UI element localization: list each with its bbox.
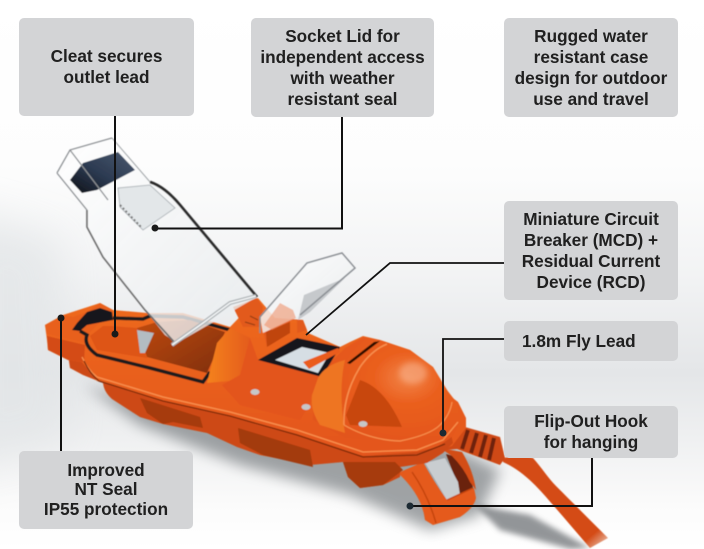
product shadow <box>85 385 590 549</box>
skirt recess left <box>140 398 203 428</box>
leader line: hook <box>406 458 592 510</box>
callout: hook: Flip-Out Hook <box>534 411 648 431</box>
callout: seal <box>19 451 193 529</box>
dark lid seal <box>70 152 135 193</box>
callout: circuit breaker: Breaker (MCD) + <box>524 230 658 250</box>
callout: fly lead <box>504 321 678 361</box>
inner well <box>137 320 225 373</box>
seam lines <box>82 357 458 452</box>
hinge area <box>233 298 307 347</box>
callout: seal: IP55 protection <box>44 499 168 519</box>
left end top face <box>45 303 113 343</box>
callout: socket lid <box>251 18 434 117</box>
callout: fly lead: 1.8m Fly Lead <box>522 330 636 350</box>
leader line: cleat <box>112 116 118 338</box>
platform inside well <box>90 326 147 358</box>
cleat metal contact <box>137 330 154 353</box>
callout: seal: NT Seal <box>74 479 138 499</box>
callout: socket lid: resistant seal <box>288 88 397 108</box>
hood <box>312 337 452 444</box>
callout: cleat: Cleat secures <box>51 46 162 66</box>
callout: circuit breaker <box>504 201 678 300</box>
skirt recess middle <box>238 428 313 467</box>
callout: cleat: outlet lead <box>64 67 149 87</box>
product: orange power outlet <box>45 138 608 548</box>
left end front face <box>47 336 85 362</box>
callout: circuit breaker: Residual Current <box>522 250 660 270</box>
small clear socket lid <box>260 253 355 333</box>
cleat recess black block <box>72 308 113 331</box>
callout: socket lid: independent access <box>260 46 425 66</box>
flip-out hook <box>398 448 476 525</box>
callout: hook <box>504 406 678 458</box>
rear collar <box>436 392 466 452</box>
callout: rugged case: Rugged water <box>534 26 648 46</box>
centre orange bridge <box>207 328 258 383</box>
front panel <box>222 338 322 420</box>
strain relief <box>445 420 505 465</box>
callout: rugged case: resistant case <box>534 46 648 66</box>
callout: rugged case <box>504 18 678 117</box>
cord <box>503 456 608 548</box>
main body top <box>45 298 460 456</box>
lower skirt <box>68 350 453 488</box>
screws <box>250 389 368 427</box>
callout: rugged case: use and travel <box>533 88 649 108</box>
lid base rim <box>172 296 256 345</box>
callout: socket lid: with weather <box>290 68 395 88</box>
leader line: fly lead <box>440 339 504 436</box>
seal gasket <box>80 316 230 382</box>
skirt recess right <box>343 462 403 488</box>
callout: rugged case: design for outdoor <box>515 68 667 88</box>
leader line: circuit breaker <box>306 263 504 335</box>
leader line: socket lid <box>152 117 342 232</box>
lid latch <box>118 185 175 230</box>
callout: circuit breaker: Device (RCD) <box>537 272 645 292</box>
callout: seal: Improved <box>67 460 145 480</box>
callout: circuit breaker: Miniature Circuit <box>523 208 659 228</box>
callout: cleat <box>19 18 194 116</box>
callout: socket lid: Socket Lid for <box>285 26 400 46</box>
socket compartment <box>258 338 340 377</box>
callout: hook: for hanging <box>544 432 638 452</box>
large clear socket lid <box>57 138 257 345</box>
leader line: seal <box>58 314 64 451</box>
